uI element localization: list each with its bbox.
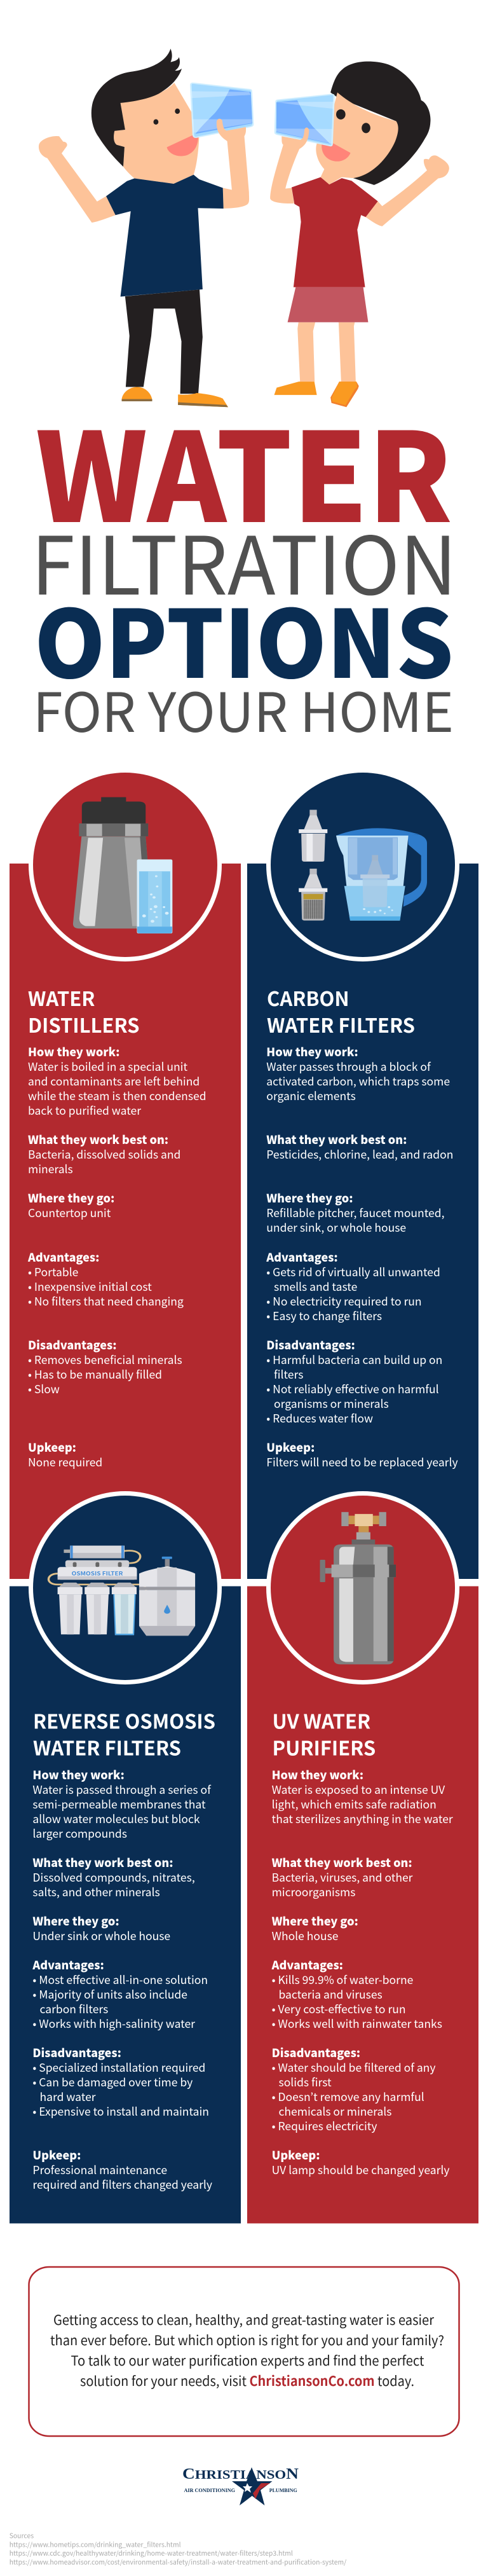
details text: • Not reliably effective on harmful xyxy=(266,1381,439,1397)
details text: Where they go: xyxy=(28,1190,114,1206)
details text: Water is boiled in a special unit xyxy=(28,1059,187,1075)
details text: that sterilizes anything in the water xyxy=(272,1811,453,1827)
details text: How they work: xyxy=(272,1767,363,1783)
details text: Whole house xyxy=(272,1928,339,1944)
details text: None required xyxy=(28,1454,102,1470)
label: osmosis filter: OSMOSIS FILTER xyxy=(72,1569,123,1577)
details text: Upkeep: xyxy=(28,1439,76,1456)
details text: Countertop unit xyxy=(28,1205,111,1221)
details text: solids first xyxy=(278,2074,332,2090)
logo: Christianson: PLUMBING xyxy=(269,2487,297,2493)
panel: carbon water filters xyxy=(247,768,478,1579)
details text: What they work best on: xyxy=(266,1131,407,1148)
details text: Filters will need to be replaced yearly xyxy=(266,1454,458,1470)
details text: Where they go: xyxy=(32,1913,119,1929)
details text: Disadvantages: xyxy=(272,2044,360,2061)
details text: UV lamp should be changed yearly xyxy=(272,2162,449,2178)
heading xyxy=(33,1705,215,1761)
icon: water pitcher and carbon filters xyxy=(299,809,427,921)
details text: Disadvantages: xyxy=(28,1337,117,1353)
details text: Refillable pitcher, faucet mounted, xyxy=(266,1205,444,1221)
details text: • Reduces water flow xyxy=(266,1410,373,1426)
details text: carbon filters xyxy=(39,2001,108,2017)
heading: WATER FILTERS xyxy=(33,1732,181,1761)
details text: • No filters that need changing xyxy=(28,1293,184,1309)
details text: Under sink or whole house xyxy=(32,1928,170,1944)
heading: WATER FILTERS xyxy=(267,1010,415,1038)
details text: Bacteria, viruses, and other xyxy=(272,1870,413,1885)
heading: UV WATER xyxy=(272,1705,370,1735)
details text: Water is passed through a series of xyxy=(32,1782,212,1798)
details text: • Inexpensive initial cost xyxy=(28,1279,152,1295)
logo: Christianson: AIR CONDITIONING xyxy=(184,2487,235,2493)
panel: reverse osmosis water filters xyxy=(10,1491,241,2223)
man figure xyxy=(39,49,253,407)
details text: Upkeep: xyxy=(32,2147,81,2163)
details text: semi-permeable membranes that xyxy=(32,1796,206,1812)
callout box xyxy=(29,2267,459,2436)
details text: Upkeep: xyxy=(272,2147,320,2163)
title line: OPTIONS: OPTIONS xyxy=(34,570,454,705)
details text: • Specialized installation required xyxy=(32,2060,205,2076)
details text: bacteria and viruses xyxy=(278,1987,383,2002)
heading: WATER xyxy=(28,983,95,1012)
details text: What they work best on: xyxy=(32,1854,173,1871)
details text: Dissolved compounds, nitrates, xyxy=(32,1870,195,1885)
details text: • Water should be filtered of any xyxy=(272,2060,435,2076)
details text xyxy=(271,1767,453,2178)
details text: Pesticides, chlorine, lead, and radon xyxy=(266,1147,453,1162)
callout text: Getting access to clean, healthy, and great-tasting water is easier xyxy=(53,2310,435,2329)
logo: Christianson xyxy=(182,2466,299,2505)
icon: water distiller with glass xyxy=(73,797,172,933)
title line: FOR YOUR HOME: FOR YOUR HOME xyxy=(33,670,454,748)
details text: Where they go: xyxy=(272,1913,358,1929)
details text: • Doesn’t remove any harmful xyxy=(272,2089,424,2105)
details text: • Requires electricity xyxy=(272,2118,377,2134)
details text: Advantages: xyxy=(32,1957,104,1973)
heading xyxy=(28,983,140,1038)
details text: What they work best on: xyxy=(28,1131,168,1148)
heading: REVERSE OSMOSIS xyxy=(33,1705,215,1735)
details text: • Slow xyxy=(28,1381,60,1397)
details text: How they work: xyxy=(28,1043,119,1060)
details text: • Very cost-effective to run xyxy=(272,2001,406,2017)
logo: Christianson: CHRISTIANSO N xyxy=(182,2466,299,2483)
sources: Sources xyxy=(10,2531,34,2540)
details text: • Kills 99.9% of water-borne xyxy=(272,1972,413,1988)
details text: under sink, or whole house xyxy=(266,1220,406,1236)
sources: https://www.homeadvisor.com/cost/environmental-safety/install-a-water-treatment-and-purification-system/ xyxy=(10,2557,346,2566)
details text: Disadvantages: xyxy=(32,2044,121,2061)
details text: and contaminants are left behind xyxy=(28,1073,200,1089)
filter cartridges xyxy=(58,1583,137,1635)
details text: salts, and other minerals xyxy=(32,1884,160,1900)
illustration: couple drinking water xyxy=(39,49,449,407)
details text: chemicals or minerals xyxy=(278,2104,391,2119)
details text: Bacteria, dissolved solids and xyxy=(28,1147,180,1162)
details text: Upkeep: xyxy=(266,1439,315,1456)
details text: • Can be damaged over time by xyxy=(32,2074,193,2090)
callout text xyxy=(50,2310,444,2390)
details text: light, which emits safe radiation xyxy=(272,1796,437,1812)
details text: required and filters changed yearly xyxy=(32,2177,212,2193)
details text: What they work best on: xyxy=(272,1854,412,1871)
heading: PURIFIERS xyxy=(272,1732,376,1761)
details text: • Most effective all-in-one solution xyxy=(32,1972,208,1988)
details text: filters xyxy=(274,1367,303,1382)
details text: Advantages: xyxy=(266,1249,338,1265)
panel: water distillers xyxy=(10,768,241,1579)
details text: organic elements xyxy=(266,1088,356,1104)
details text: • Portable xyxy=(28,1264,78,1280)
details text: microorganisms xyxy=(272,1884,355,1900)
title xyxy=(31,379,457,748)
details text: while the steam is then condensed xyxy=(28,1088,207,1104)
details text: Advantages: xyxy=(27,1249,99,1265)
details text: hard water xyxy=(39,2089,96,2105)
details text: • Has to be manually filled xyxy=(28,1367,162,1382)
sources: https://www.hometips.com/drinking_water_filters.html xyxy=(10,2540,181,2549)
details text: organisms or minerals xyxy=(274,1396,389,1412)
details text: allow water molecules but block xyxy=(32,1811,200,1827)
title line: WATER: WATER xyxy=(36,379,452,558)
details text: • Majority of units also include xyxy=(32,1987,187,2002)
logo star xyxy=(232,2467,272,2505)
details text: Water passes through a block of xyxy=(266,1059,431,1075)
sources xyxy=(10,2531,346,2566)
details text: • Works well with rainwater tanks xyxy=(272,2016,442,2032)
details text xyxy=(266,1043,458,1470)
woman figure xyxy=(270,62,449,407)
heading xyxy=(267,983,415,1038)
panel: uv water purifiers xyxy=(247,1491,478,2223)
details text: activated carbon, which traps some xyxy=(266,1073,450,1089)
details text: • Harmful bacteria can build up on xyxy=(266,1352,442,1368)
details text: • Easy to change filters xyxy=(266,1308,382,1324)
details text: • Gets rid of virtually all unwanted xyxy=(266,1264,440,1280)
icon: reverse osmosis filter system xyxy=(48,1546,195,1636)
details text: Water is exposed to an intense UV xyxy=(272,1782,445,1798)
details text: back to purified water xyxy=(28,1103,141,1119)
details text: How they work: xyxy=(32,1767,125,1783)
title line: FILTRATION: FILTRATION xyxy=(31,502,457,618)
details text: • No electricity required to run xyxy=(266,1293,422,1309)
details text: Advantages: xyxy=(271,1957,343,1973)
details text: Where they go: xyxy=(266,1190,353,1206)
details text: • Removes beneficial minerals xyxy=(28,1352,182,1368)
details text: • Expensive to install and maintain xyxy=(32,2104,209,2119)
heading: CARBON xyxy=(267,983,349,1012)
details text: Disadvantages: xyxy=(266,1337,355,1353)
details text xyxy=(32,1767,212,2193)
details text: Professional maintenance xyxy=(32,2162,167,2178)
sources: https://www.cdc.gov/healthywater/drinking/home-water-treatment/water-filters/step3.html xyxy=(10,2548,293,2558)
heading: DISTILLERS xyxy=(28,1010,140,1038)
details text xyxy=(27,1043,207,1470)
heading xyxy=(272,1705,376,1761)
details text: • Works with high-salinity water xyxy=(32,2016,195,2032)
details text: How they work: xyxy=(266,1043,358,1060)
details text: minerals xyxy=(28,1161,73,1177)
callout text: To talk to our water purification experts and find the perfect xyxy=(71,2351,424,2370)
details text: larger compounds xyxy=(32,1826,127,1842)
details text: smells and taste xyxy=(274,1279,357,1295)
icon: uv purifier xyxy=(320,1512,396,1664)
callout text: than ever before. But which option is right for you and your family? xyxy=(50,2331,444,2350)
callout text: solution for your needs, visit ChristiansonCo.com today. xyxy=(80,2371,414,2390)
